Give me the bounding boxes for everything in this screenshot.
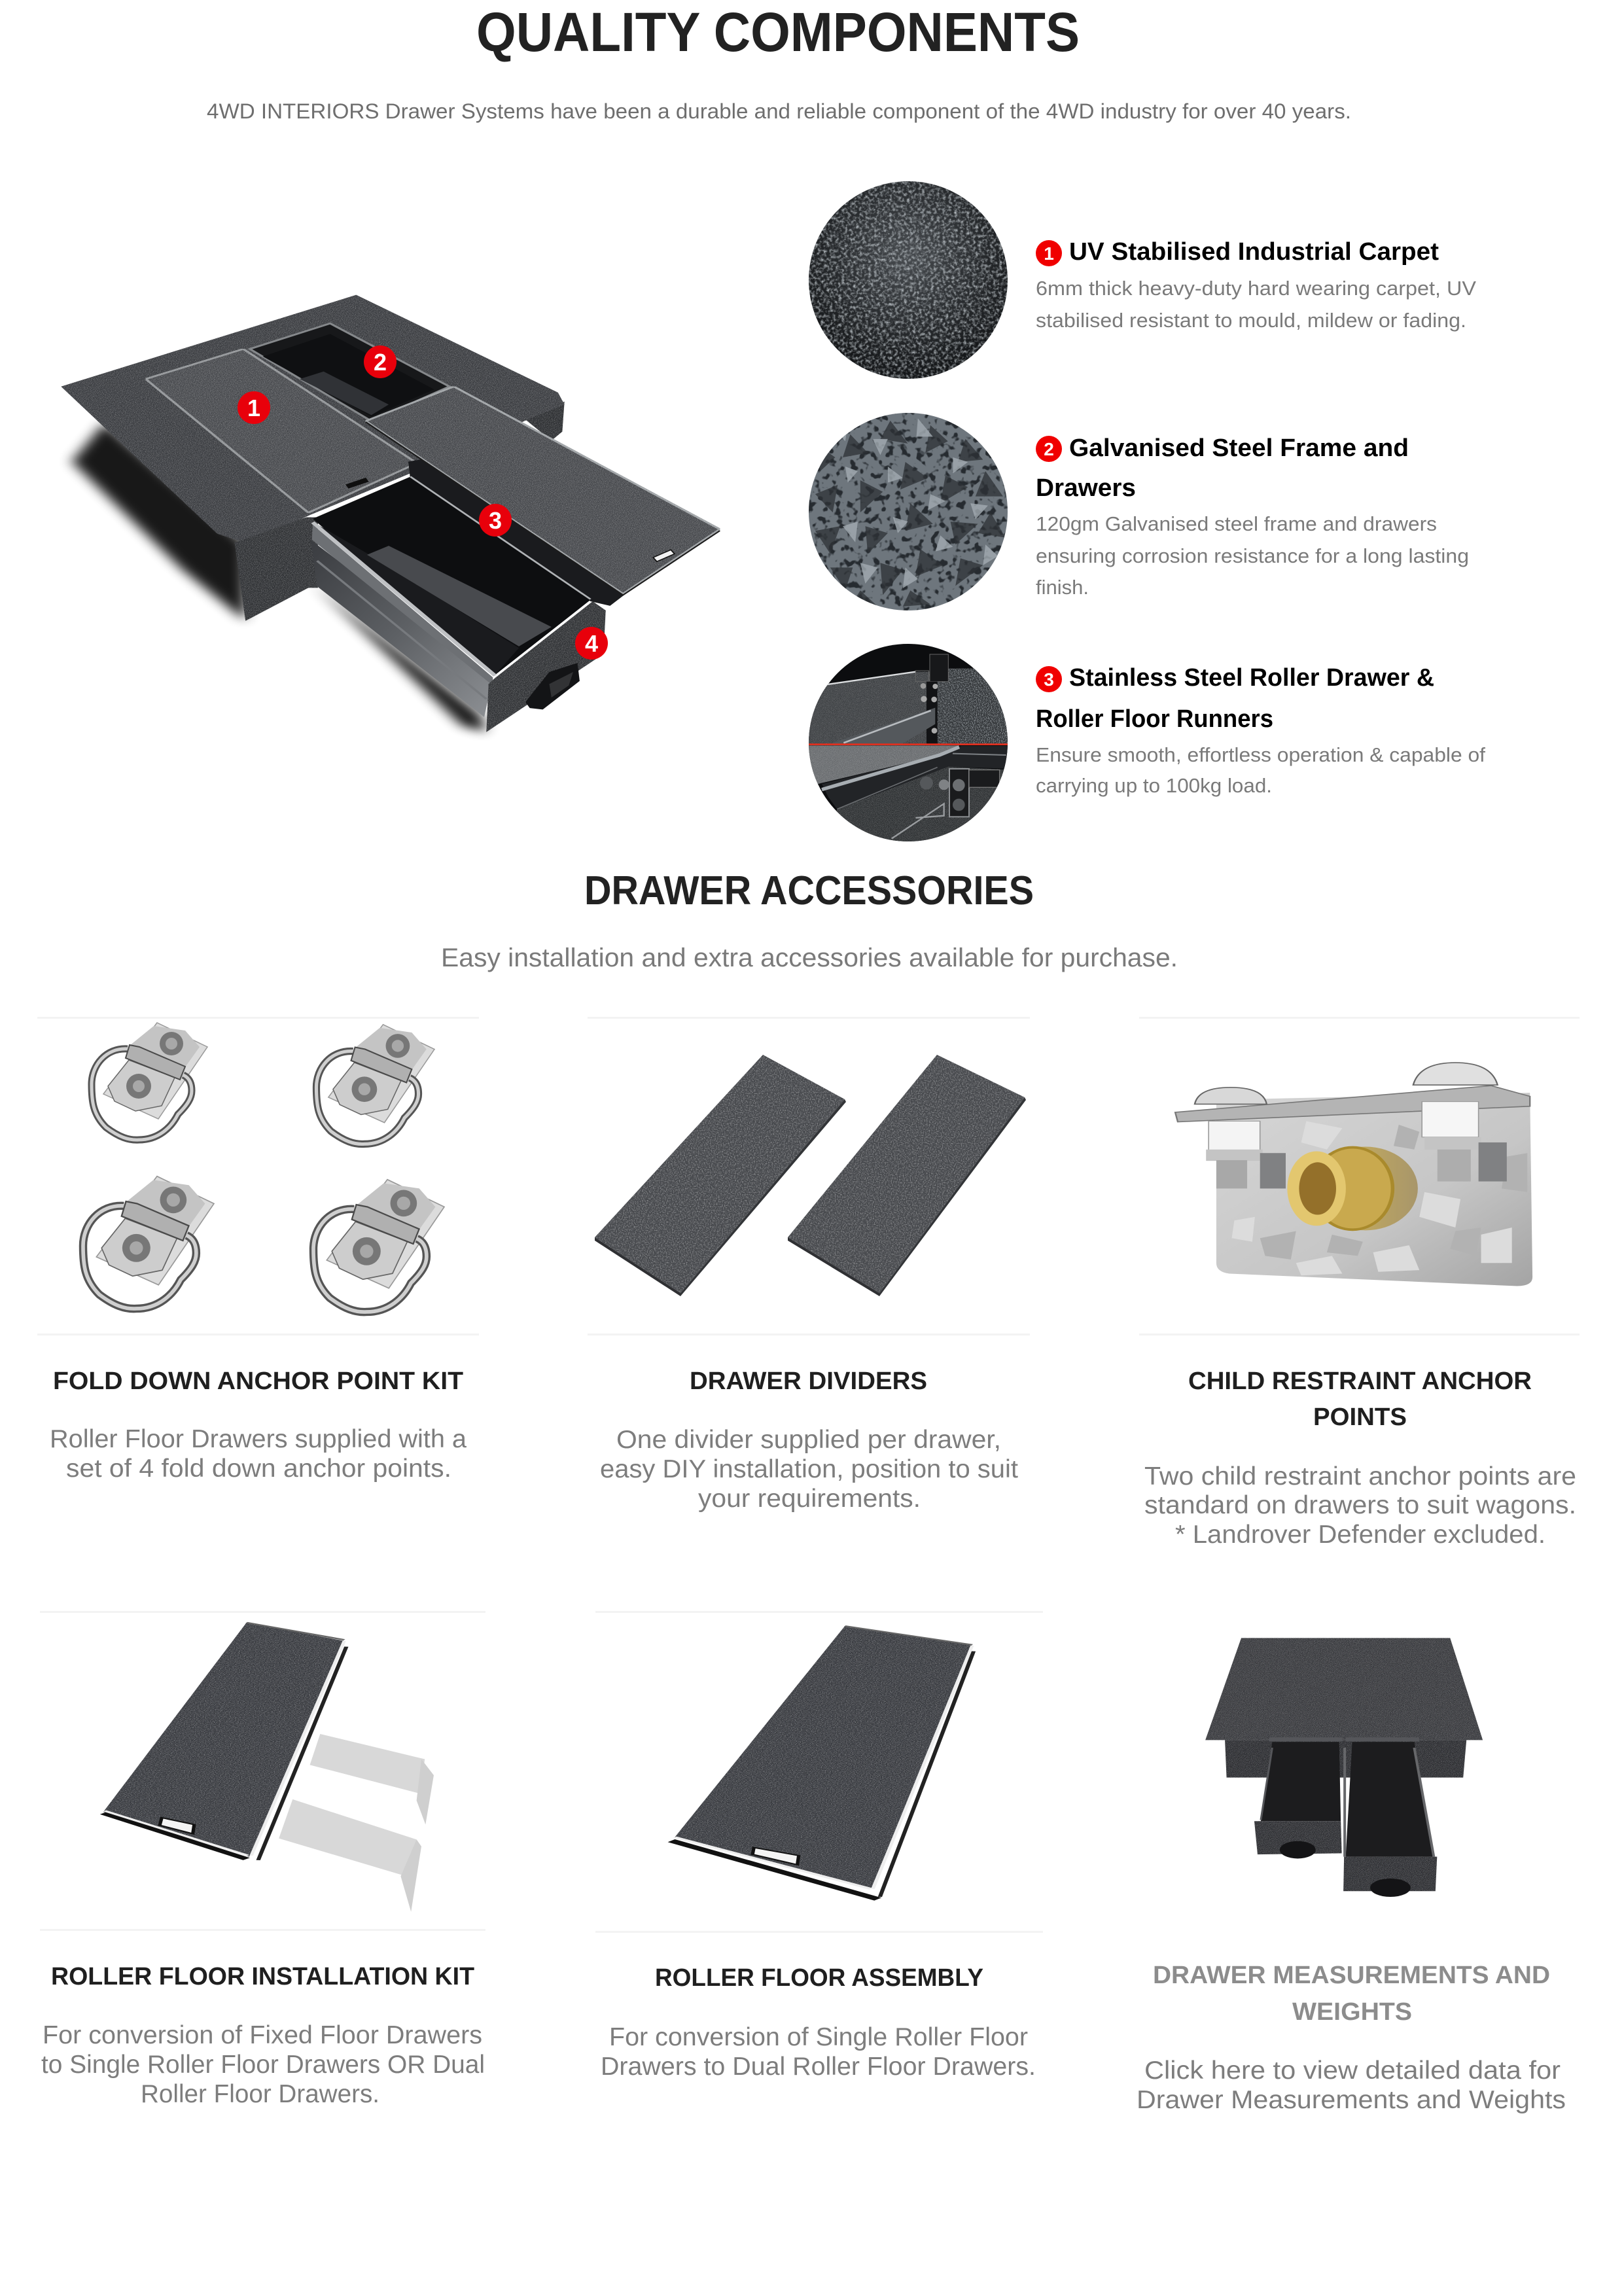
description: standard on drawers to suit wagons. (1144, 1491, 1576, 1519)
description: stabilised resistant to mould, mildew or fading. (1036, 309, 1466, 332)
brass insert (1287, 1146, 1418, 1230)
closed lid (146, 349, 417, 513)
callout 1: 1 (247, 395, 260, 421)
title (1153, 1962, 1550, 2026)
description: finish. (1036, 576, 1089, 599)
description: * Landrover Defender excluded. (1175, 1521, 1545, 1549)
description (1036, 743, 1485, 797)
callout 3 (479, 504, 512, 537)
image: roller floor panel (671, 1626, 974, 1899)
title: QUALITY COMPONENTS (476, 1, 1080, 63)
description: carrying up to 100kg load. (1036, 774, 1272, 797)
description (1036, 512, 1469, 599)
description (600, 1426, 1018, 1513)
description (1036, 277, 1476, 332)
heading: Galvanised Steel Frame and (1069, 434, 1409, 462)
description: easy DIY installation, position to suit (600, 1455, 1018, 1483)
description: Roller Floor Drawers. (141, 2080, 380, 2108)
title: ROLLER FLOOR ASSEMBLY (655, 1964, 983, 1992)
feature 1: UV stabilised carpet (809, 181, 1476, 379)
title (1188, 1368, 1532, 1431)
badge 2: 2 (1044, 439, 1054, 459)
description (1144, 1462, 1576, 1549)
badge 2 (1036, 436, 1062, 462)
heading (1036, 664, 1434, 733)
callout 4: 4 (585, 630, 598, 657)
right runner rail (410, 476, 590, 599)
description: 6mm thick heavy-duty hard wearing carpet, UV (1036, 277, 1476, 300)
callout 2: 2 (374, 349, 387, 376)
badge 3: 3 (1044, 669, 1054, 690)
drawer front (486, 601, 606, 732)
badge 1: 1 (1044, 243, 1054, 264)
carpet swatch (809, 181, 1008, 379)
subtitle: 4WD INTERIORS Drawer Systems have been a durable and reliable component of the 4WD industry for over 40 years. (207, 99, 1351, 123)
card: fold down anchor point kit (37, 1017, 479, 1483)
description (50, 1425, 467, 1483)
description: Drawers to Dual Roller Floor Drawers. (601, 2053, 1036, 2081)
heading (1036, 434, 1409, 502)
heading: Roller Floor Runners (1036, 705, 1273, 733)
description (1137, 2057, 1566, 2114)
description: For conversion of Single Roller Floor (609, 2023, 1028, 2051)
drawer carcass top (61, 295, 565, 542)
icon: four anchor points (83, 1023, 444, 1312)
feature 2: galvanised steel (809, 413, 1469, 610)
description: Two child restraint anchor points are (1144, 1462, 1576, 1491)
card: roller floor installation kit (40, 1611, 485, 2108)
top drawer opening (250, 323, 450, 421)
section heading: DRAWER ACCESSORIES (584, 868, 1034, 913)
title: POINTS (1313, 1404, 1407, 1431)
hero image: drawer system with numbered callouts (61, 295, 720, 732)
bolts (1195, 1063, 1507, 1188)
heading: Stainless Steel Roller Drawer & (1069, 664, 1434, 692)
description: to Single Roller Floor Drawers OR Dual (41, 2051, 485, 2079)
description: Ensure smooth, effortless operation & capable of (1036, 743, 1485, 766)
description (601, 2023, 1036, 2081)
image: roller floor panel and brackets (103, 1623, 434, 1912)
title: ROLLER FLOOR INSTALLATION KIT (51, 1963, 474, 1990)
runner bed behind drawer (408, 459, 629, 606)
description: Click here to view detailed data for (1144, 2057, 1561, 2085)
image: two carpet dividers (595, 1055, 1026, 1296)
section subheading: Easy installation and extra accessories available for purchase. (441, 944, 1178, 972)
galvanised swatch (809, 413, 1008, 610)
badge 3 (1036, 666, 1062, 692)
feature 3: stainless steel rollers (809, 641, 1485, 844)
drop shadow (72, 423, 486, 732)
description: set of 4 fold down anchor points. (66, 1455, 451, 1483)
heading: UV Stabilised Industrial Carpet (1069, 238, 1439, 266)
drawer latch (525, 663, 580, 709)
title: FOLD DOWN ANCHOR POINT KIT (53, 1368, 463, 1395)
badge 1 (1036, 240, 1062, 266)
description: One divider supplied per drawer, (616, 1426, 1001, 1454)
card: child restraint anchor points (1139, 1017, 1580, 1549)
image: child restraint bracket (1175, 1063, 1532, 1286)
description: your requirements. (698, 1485, 921, 1513)
roller swatch (809, 641, 1012, 844)
card: drawer dividers (588, 1017, 1030, 1513)
side panel front (235, 517, 318, 621)
callout 2 (364, 345, 397, 378)
title: DRAWER DIVIDERS (690, 1368, 927, 1395)
description: For conversion of Fixed Floor Drawers (43, 2021, 482, 2049)
right side panel (525, 402, 565, 440)
image: dual drawer cabinet (1205, 1638, 1483, 1897)
callout 3: 3 (489, 507, 502, 534)
title: CHILD RESTRAINT ANCHOR (1188, 1368, 1532, 1395)
description: ensuring corrosion resistance for a long lasting (1036, 544, 1469, 567)
title: DRAWER MEASUREMENTS AND (1153, 1962, 1550, 1989)
card: roller floor assembly (595, 1611, 1043, 2081)
description (41, 2021, 485, 2108)
description: Roller Floor Drawers supplied with a (50, 1425, 467, 1453)
card: drawer measurements and weights (1137, 1638, 1566, 2114)
callout 1 (238, 391, 270, 424)
description: Drawer Measurements and Weights (1137, 2086, 1566, 2114)
callout 4 (575, 627, 608, 660)
title: WEIGHTS (1292, 1998, 1412, 2026)
open drawer interior (313, 476, 590, 675)
drawer extrusion (311, 540, 493, 717)
description: 120gm Galvanised steel frame and drawers (1036, 512, 1437, 535)
heading: Drawers (1036, 474, 1136, 502)
sliding lid (366, 387, 720, 594)
